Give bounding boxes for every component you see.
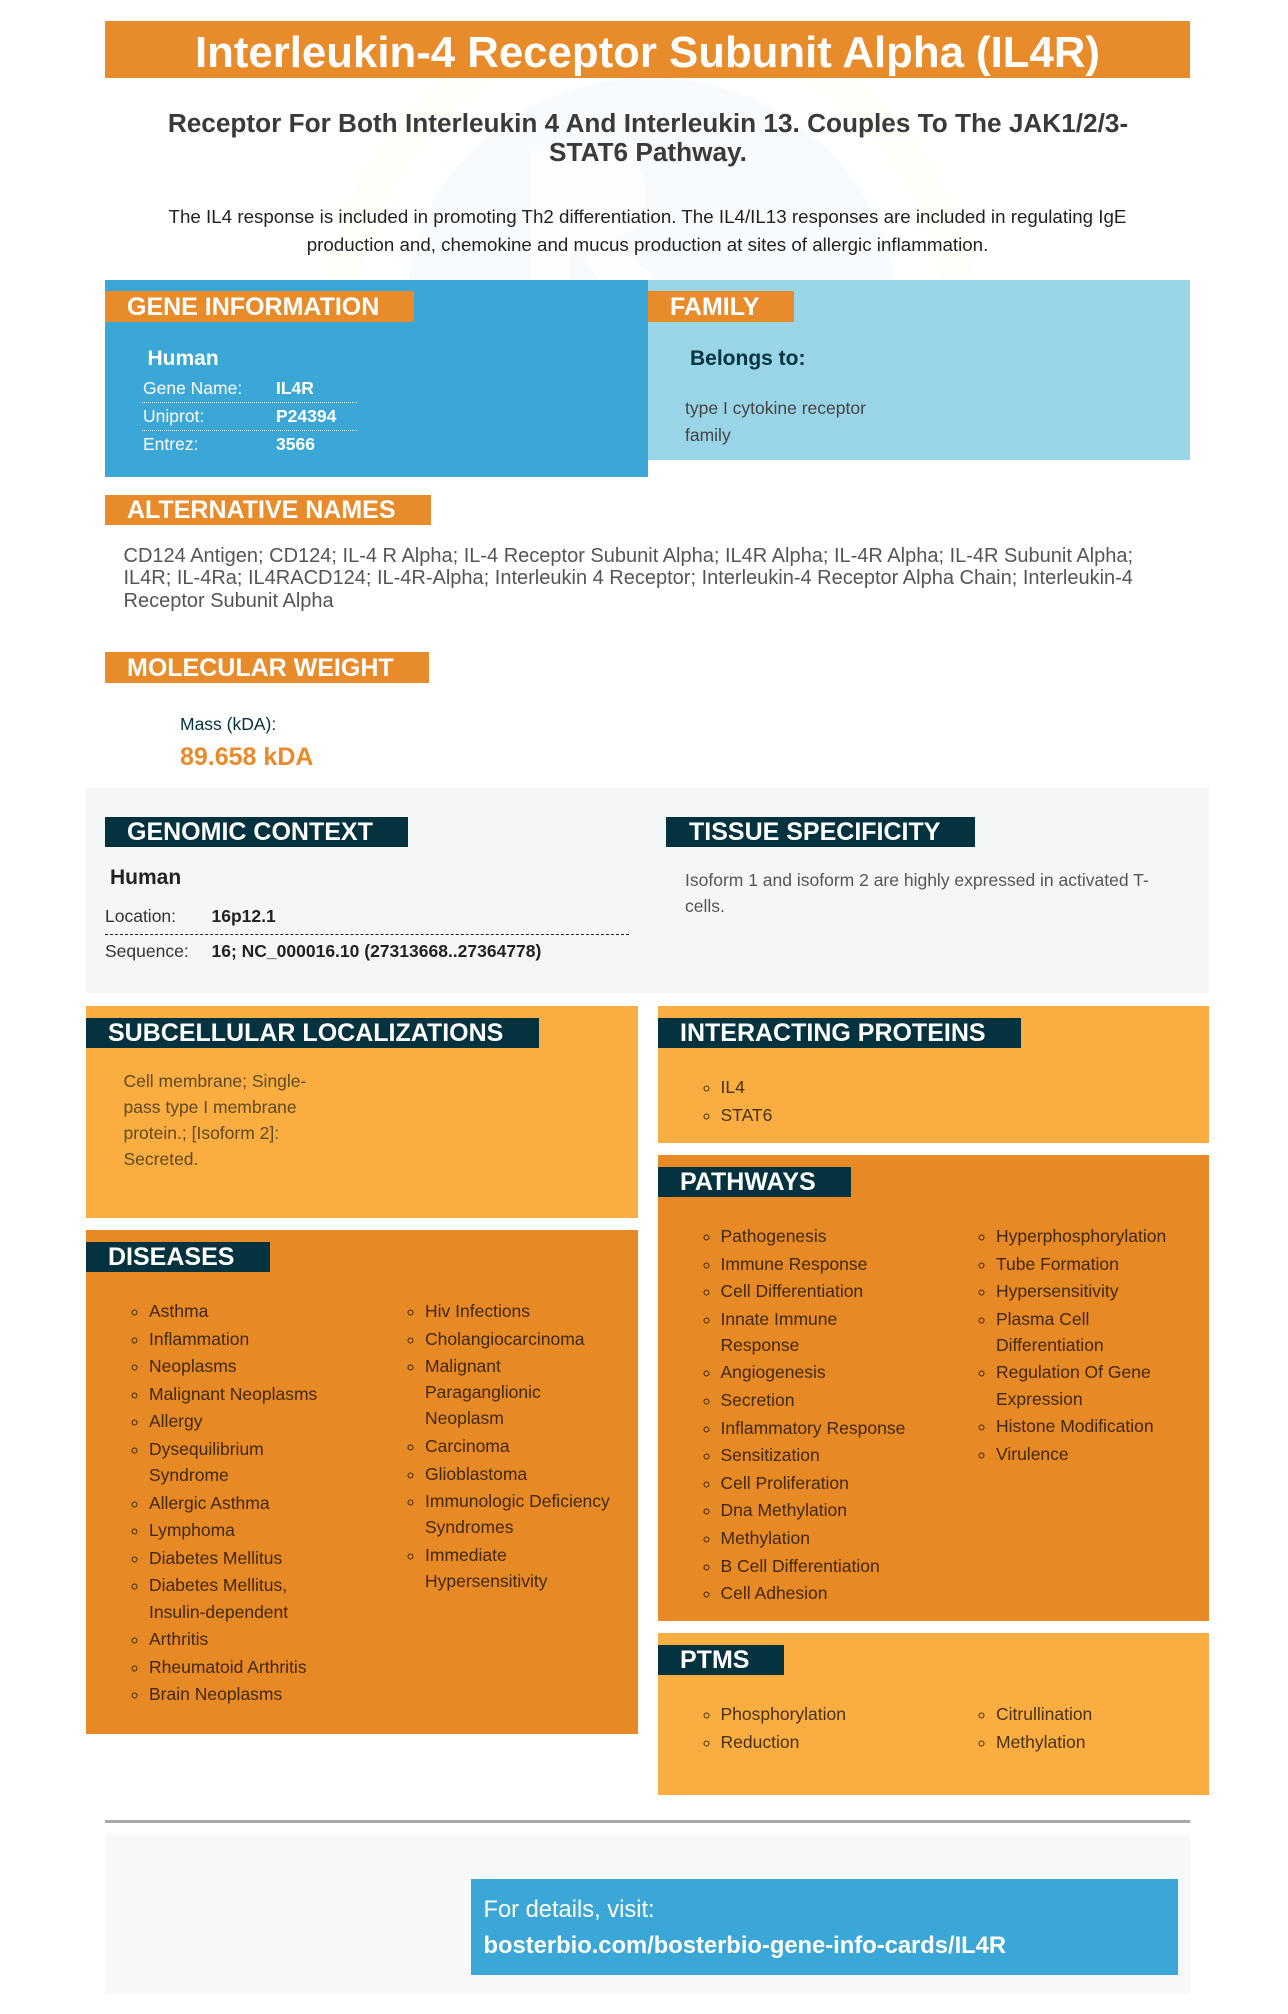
interacting proteins list — [704, 1077, 772, 1125]
pathways list column 1: Pathogenesis — [720, 1226, 827, 1246]
heading: pathways — [658, 1167, 851, 1197]
heading: gene information: GENE INFORMATION — [127, 293, 379, 321]
disease list column 1: Arthritis — [149, 1629, 208, 1649]
alternative names text: Receptor Subunit Alpha — [124, 590, 334, 612]
location row: Location: — [105, 906, 176, 926]
gene table: P24394 — [276, 406, 336, 426]
ptms list column 1 — [704, 1704, 846, 1752]
pathways list column 1: Response — [720, 1335, 799, 1355]
location row — [105, 906, 276, 926]
species label: Human — [110, 866, 181, 889]
description: production and, chemokine and mucus production at sites of allergic inflammation. — [307, 234, 988, 255]
pathways list column 1: Cell Differentiation — [720, 1281, 863, 1301]
interacting proteins list: IL4 — [720, 1077, 745, 1097]
disease list column 1: Neoplasms — [149, 1356, 237, 1376]
pathways list column 1 — [704, 1226, 905, 1603]
gene table: Uniprot: — [143, 406, 204, 426]
pathways list column 2: Plasma Cell — [996, 1309, 1089, 1329]
heading: diseases: DISEASES — [108, 1243, 234, 1271]
disease list column 1: Allergy — [149, 1411, 202, 1431]
pathways list column 1: Innate Immune — [720, 1309, 837, 1329]
family text: type I cytokine receptor — [685, 398, 866, 418]
subcellular text: pass type I membrane — [124, 1097, 297, 1117]
disease list column 1: Syndrome — [149, 1465, 229, 1485]
heading: ptms — [658, 1645, 784, 1675]
tissue specificity text — [685, 870, 1149, 916]
alternative names text — [124, 545, 1133, 612]
pathways list column 2 — [978, 1226, 1166, 1464]
disease list column 1: Brain Neoplasms — [149, 1684, 282, 1704]
heading: tissue specificity: TISSUE SPECIFICITY — [689, 818, 940, 846]
panel: footer — [105, 1835, 1190, 1994]
panel: subcellular localizations — [86, 1006, 638, 1218]
panel: pathways — [658, 1155, 1209, 1621]
gene table: Entrez: — [143, 434, 198, 454]
panel: genomic context and tissue specificity — [86, 788, 1209, 993]
disease list column 2: Immediate — [425, 1545, 507, 1565]
heading: genomic context: GENOMIC CONTEXT — [127, 818, 373, 846]
ptms list column 2 — [978, 1704, 1092, 1752]
panel: interacting proteins — [658, 1006, 1209, 1143]
gene table: IL4R — [276, 378, 314, 398]
pathways list column 2: Expression — [996, 1389, 1083, 1409]
sequence row: Sequence: — [105, 940, 189, 960]
sequence row: 16; NC_000016.10 (27313668..27364778) — [212, 940, 541, 960]
disease list column 1: Diabetes Mellitus — [149, 1548, 282, 1568]
callout: details link — [471, 1879, 1178, 1975]
family text — [685, 398, 866, 444]
pathways list column 1: Sensitization — [720, 1445, 820, 1465]
disease list column 1: Insulin-dependent — [149, 1602, 288, 1622]
pathways list column 1: Methylation — [720, 1528, 810, 1548]
disease list column 2: Immunologic Deficiency — [425, 1491, 610, 1511]
disease list column 2: Syndromes — [425, 1517, 514, 1537]
tissue specificity text: cells. — [685, 896, 725, 916]
heading: subcellular localizations: SUBCELLULAR LOCALIZATIONS — [108, 1019, 503, 1047]
mass label: Mass (kDA): — [180, 714, 276, 734]
ptms list column 2: Citrullination — [996, 1704, 1092, 1724]
belongs to label: Belongs to: — [690, 347, 806, 370]
heading: alternative names: ALTERNATIVE NAMES — [127, 496, 396, 524]
subcellular text: Secreted. — [124, 1149, 198, 1169]
pathways list column 1: Inflammatory Response — [720, 1418, 905, 1438]
pathways list column 1: Immune Response — [720, 1254, 867, 1274]
pathways list column 1: Cell Adhesion — [720, 1583, 828, 1603]
alternative names text: IL4R; IL-4Ra; IL4RACD124; IL-4R-Alpha; Interleukin 4 Receptor; Interleukin-4 Receptor Alpha Chain; Interleukin-4 — [124, 567, 1133, 589]
disease list column 1: Malignant Neoplasms — [149, 1384, 317, 1404]
disease list column 1: Rheumatoid Arthritis — [149, 1657, 307, 1677]
pathways list column 1: Angiogenesis — [720, 1362, 826, 1382]
mass value: 89.658 kDA — [180, 742, 313, 770]
heading: family — [648, 291, 794, 322]
pathways list column 2: Hypersensitivity — [996, 1281, 1119, 1301]
disease list column 2: Malignant — [425, 1356, 501, 1376]
tissue specificity text: Isoform 1 and isoform 2 are highly expressed in activated T- — [685, 870, 1149, 890]
disease list column 1: Inflammation — [149, 1329, 249, 1349]
disease list column 2: Hypersensitivity — [425, 1571, 548, 1591]
title: Interleukin-4 Receptor Subunit Alpha (IL4R) — [195, 28, 1100, 77]
disease list column 1: Allergic Asthma — [149, 1493, 270, 1513]
heading: pathways: PATHWAYS — [680, 1168, 816, 1196]
disease list column 1: Asthma — [149, 1301, 208, 1321]
heading: ptms: PTMS — [680, 1646, 749, 1674]
location row: 16p12.1 — [212, 906, 276, 926]
pathways list column 2: Hyperphosphorylation — [996, 1226, 1166, 1246]
subcellular text: protein.; [Isoform 2]: — [124, 1123, 279, 1143]
heading: diseases — [86, 1242, 270, 1272]
subtitle: Receptor For Both Interleukin 4 And Interleukin 13. Couples To The JAK1/2/3- — [168, 108, 1128, 138]
disease list column 2: Hiv Infections — [425, 1301, 530, 1321]
callout label: For details, visit: — [484, 1896, 655, 1922]
interacting proteins list: STAT6 — [720, 1105, 772, 1125]
panel: gene information — [105, 280, 648, 477]
family text: family — [685, 424, 731, 444]
disease list column 1: Diabetes Mellitus, — [149, 1575, 287, 1595]
gene table — [142, 378, 357, 454]
description — [168, 206, 1126, 255]
panel: diseases — [86, 1230, 638, 1734]
disease list column 1: Dysequilibrium — [149, 1439, 264, 1459]
description: The IL4 response is included in promoting Th2 differentiation. The IL4/IL13 responses are included in regulating IgE — [169, 206, 1126, 226]
disease list column 2: Glioblastoma — [425, 1464, 527, 1484]
gene table: 3566 — [276, 434, 315, 454]
panel: family — [648, 280, 1190, 460]
alternative names text: CD124 Antigen; CD124; IL-4 R Alpha; IL-4 Receptor Subunit Alpha; IL4R Alpha; IL-4R Alpha; IL-4R Subunit Alpha; — [124, 545, 1133, 567]
disease list column 1 — [132, 1301, 317, 1704]
subcellular text: Cell membrane; Single- — [124, 1070, 306, 1090]
ptms list column 1: Reduction — [720, 1732, 799, 1752]
callout url: bosterbio.com/bosterbio-gene-info-cards/IL4R — [484, 1932, 1006, 1958]
disease list column 2 — [408, 1301, 610, 1591]
subtitle — [168, 108, 1128, 166]
pathways list column 2: Tube Formation — [996, 1254, 1119, 1274]
pathways list column 1: Secretion — [720, 1390, 794, 1410]
pathways list column 2: Regulation Of Gene — [996, 1362, 1151, 1382]
disease list column 2: Carcinoma — [425, 1436, 510, 1456]
disease list column 2: Paraganglionic — [425, 1382, 541, 1402]
disease list column 2: Neoplasm — [425, 1408, 504, 1428]
heading: family: FAMILY — [670, 293, 759, 321]
pathways list column 1: Dna Methylation — [720, 1500, 847, 1520]
pathways list column 2: Histone Modification — [996, 1416, 1154, 1436]
pathways list column 2: Differentiation — [996, 1335, 1104, 1355]
pathways list column 1: B Cell Differentiation — [720, 1556, 880, 1576]
ptms list column 2: Methylation — [996, 1732, 1086, 1752]
heading: molecular weight: MOLECULAR WEIGHT — [127, 654, 394, 682]
panel: ptms — [658, 1633, 1209, 1795]
disease list column 1: Lymphoma — [149, 1520, 235, 1540]
species label: Human — [148, 347, 219, 370]
disease list column 2: Cholangiocarcinoma — [425, 1329, 585, 1349]
ptms list column 1: Phosphorylation — [720, 1704, 846, 1724]
subcellular text — [124, 1070, 306, 1169]
watermark logo — [300, 70, 1000, 280]
heading: interacting proteins: INTERACTING PROTEINS — [680, 1019, 986, 1047]
pathways list column 1: Cell Proliferation — [720, 1473, 849, 1493]
subtitle: STAT6 Pathway. — [549, 136, 747, 166]
gene table: Gene Name: — [143, 378, 242, 398]
pathways list column 2: Virulence — [996, 1444, 1069, 1464]
